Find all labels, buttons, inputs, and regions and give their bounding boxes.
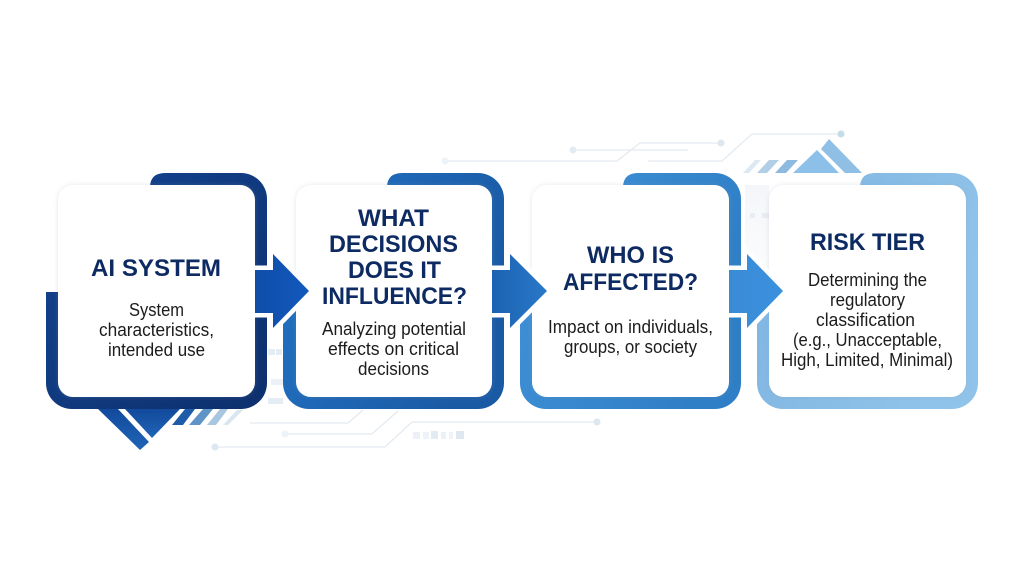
text: risk tier description: regulatory [830, 289, 906, 310]
text: decisions description: Analyzing potential [322, 318, 466, 339]
heading: affected [563, 242, 698, 296]
decorative mark: bottom left triangle and stripes [98, 409, 243, 450]
frame: risk tier [757, 173, 978, 409]
text: decisions description: effects on critical [328, 338, 459, 359]
text: risk tier description: (e.g., Unacceptable, [793, 329, 942, 350]
text: affected description [548, 316, 713, 357]
arrow: decisions to affected [492, 254, 547, 328]
text: AI system description: intended use [108, 339, 205, 360]
heading: risk tier: RISK TIER [810, 229, 925, 256]
card: decisions [296, 185, 492, 397]
heading: affected: AFFECTED? [563, 269, 698, 296]
heading: decisions [322, 205, 467, 310]
heading: decisions: DOES IT [348, 257, 441, 284]
decorative circuit lines: top [442, 130, 844, 164]
card: affected [532, 185, 729, 397]
text: risk tier description [781, 269, 953, 370]
text: AI system description: characteristics, [99, 319, 214, 340]
panel: AI system [46, 173, 267, 409]
arrow: AI system to decisions [255, 254, 309, 328]
decorative mark: top right triangle and stripes [743, 139, 862, 173]
decorative data blocks [268, 185, 769, 439]
panel: who is affected [520, 173, 741, 409]
text: risk tier description: High, Limited, Minimal) [781, 349, 953, 370]
frame: affected [520, 173, 741, 409]
frame: AI system [46, 173, 267, 409]
heading: decisions: DECISIONS [329, 231, 458, 258]
heading: AI system: AI SYSTEM [91, 255, 221, 282]
panel: what decisions does it influence [283, 173, 504, 409]
text: decisions description: decisions [358, 358, 429, 379]
text: decisions description [322, 318, 466, 379]
arrow: affected to risk tier [729, 254, 783, 328]
heading: affected: WHO IS [587, 242, 674, 269]
frame: decisions [283, 173, 504, 409]
decorative circuit lines: bottom [212, 410, 600, 450]
text: AI system description [99, 299, 214, 360]
card: risk tier [769, 185, 966, 397]
text: risk tier description: classification [816, 309, 915, 330]
heading: decisions: WHAT [358, 205, 429, 232]
heading: decisions: INFLUENCE? [322, 283, 467, 310]
panel: risk tier [757, 173, 978, 409]
text: affected description: groups, or society [564, 336, 698, 357]
card: AI system [58, 185, 255, 397]
text: risk tier description: Determining the [808, 269, 927, 290]
text: AI system description: System [129, 299, 184, 320]
text: affected description: Impact on individuals, [548, 316, 713, 337]
